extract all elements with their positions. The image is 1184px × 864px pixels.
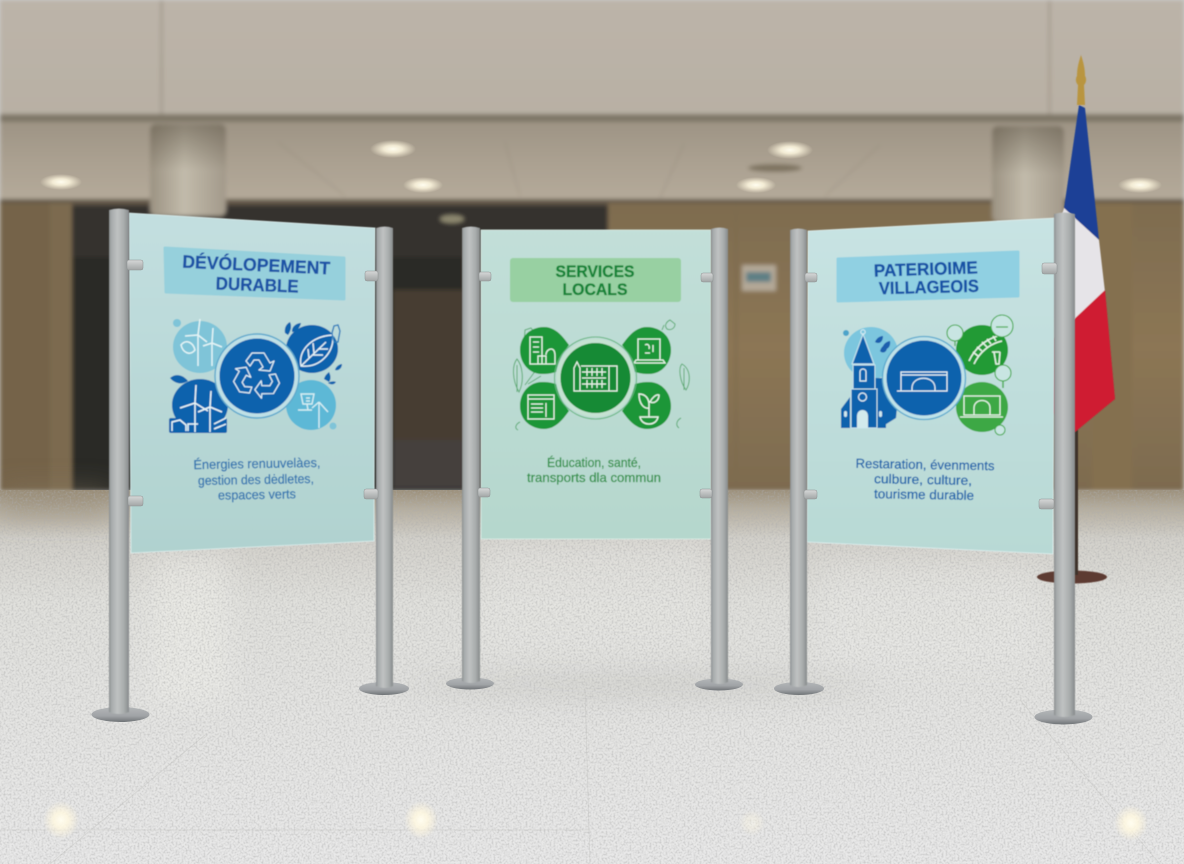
flag: blue [1064,105,1099,240]
French flag on pole [1037,55,1115,584]
icon cluster: public services [513,320,689,430]
icon: device and turbine on light circle [286,380,336,430]
post bases [92,678,1092,724]
title band [838,252,1018,301]
icon: stone bridge [897,372,947,391]
icon: recycling arrows [229,353,282,402]
background: hall interior [0,0,1184,491]
body text: Énergies renuuvelàes, [193,455,321,472]
icon: light blue leaf circle [843,327,898,379]
title text: LOCALS [562,280,628,299]
icon cluster: heritage [841,315,1013,435]
icon: central bridge circle [882,336,966,420]
metal posts [109,208,1075,717]
panel: Développement durable [129,213,375,553]
glass panel clamps [127,260,1057,509]
gold finial [1076,55,1086,105]
icon: central recycling circle [215,334,299,418]
title text [874,257,979,298]
icon: town hall building blob [520,327,569,374]
icon: central school building circle [554,337,636,419]
icon: potted plant blob [622,382,671,429]
body text: culbure, culture, [874,471,972,488]
title text: SERVICES [556,262,634,281]
title text: DÉVÓLOPEMENT [182,251,331,278]
flag: white [1054,208,1105,340]
decorative plant outlines [513,320,689,430]
body text: Restaration, évenments [855,456,995,473]
icon: laptop blob [622,327,671,374]
flag stand base [1037,570,1107,584]
icon: school building [574,362,617,391]
body text: Éducation, santé, [547,455,641,470]
icon: green circle with stone bridge [956,382,1008,435]
icon: wind turbines on light circle [173,319,227,373]
icon: leaf on dark circle [285,322,342,384]
floor [0,490,1184,864]
body text: tourisme durable [874,486,974,503]
title band [510,258,681,302]
title text: DURABLE [215,273,299,297]
body text [527,455,661,485]
body text [193,455,321,503]
title text: VILLAGEOIS [879,276,979,298]
flag pole [1073,425,1078,575]
flag: red [1052,290,1115,432]
panel: Services locaux [481,230,711,539]
title band [165,248,344,299]
title text: PATERIOIME [874,257,978,281]
body text: espaces verts [218,486,297,503]
icon: green circle with footbridge [947,315,1013,388]
body text [855,456,995,503]
body text: transports dla commun [527,470,661,485]
body text: gestion des dėdletes, [198,471,314,488]
icon: church [841,330,886,428]
ceiling lights [40,140,1162,193]
icon cluster: recycling and energy [169,319,342,433]
title text [556,262,634,299]
icon: wind turbines on dark circle [169,375,228,433]
title text [182,251,331,297]
dark blue segment behind church [866,378,900,428]
panel: Patrimoine villageois [807,218,1055,554]
icon: timetable blob [520,382,569,429]
